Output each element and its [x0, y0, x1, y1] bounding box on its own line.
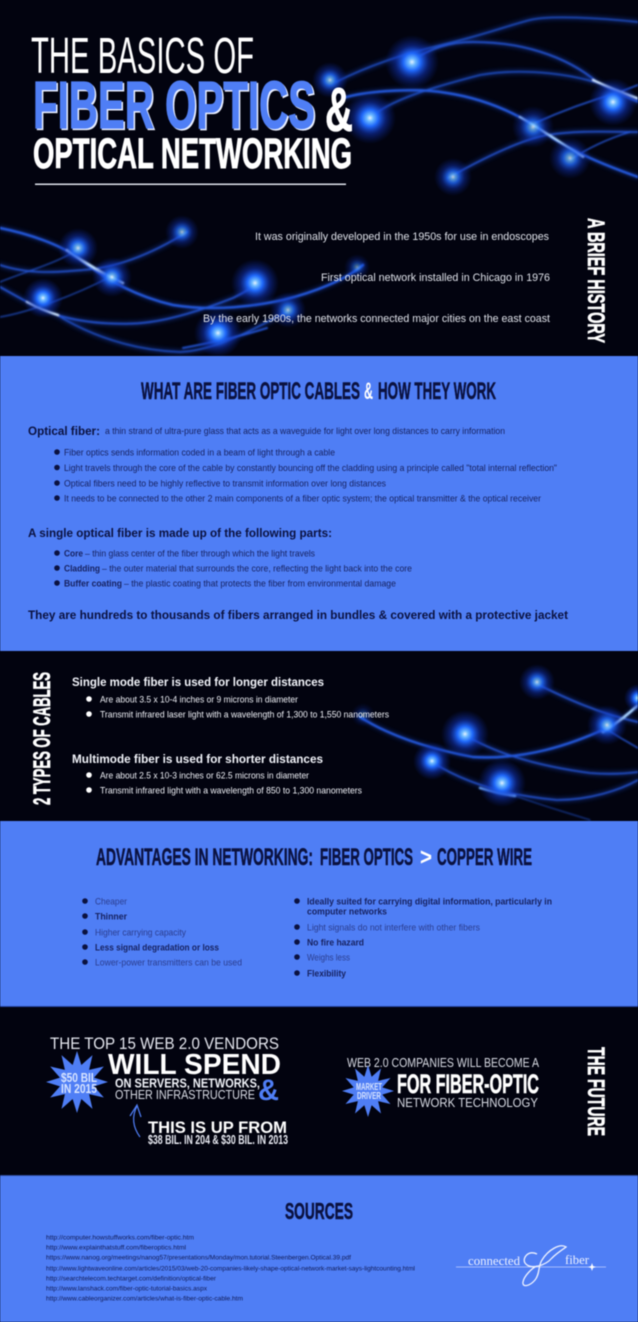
hero fiber strands	[336, 17, 638, 178]
logo: connected fiber: fiber	[565, 1252, 590, 1267]
parts bullets: Core	[64, 548, 83, 560]
optical fiber bullets	[54, 448, 557, 504]
cable types glow points	[351, 664, 638, 807]
optical fiber bullets: It needs to be connected to the other 2 main components of a fiber optic system; the optical transmitter & the optical receiver	[64, 494, 541, 504]
arrow	[130, 1105, 141, 1137]
up from figures: $38 BIL. IN 204 & $30 BIL. IN 2013	[148, 1132, 288, 1147]
servers line: ON SERVERS, NETWORKS,	[115, 1076, 260, 1090]
optical fiber bullets: Optical fibers need to be highly reflective to transmit information over long distances	[64, 478, 386, 490]
heading: ADVANTAGES IN NETWORKING:	[96, 844, 313, 871]
single mode block: Are about 3.5 x 10-4 inches or 9 microns in diameter	[100, 694, 298, 706]
panel: 2 types of cables	[29, 672, 389, 805]
parts subheading: A single optical fiber is made up of the following parts:	[28, 528, 332, 540]
history text: By the early 1980s, the networks connected major cities on the east coast	[203, 313, 550, 325]
title ampersand: &	[325, 76, 353, 145]
heading: COPPER WIRE	[437, 844, 532, 871]
left advantages list: Higher carrying capacity	[95, 928, 186, 938]
source links: http://www.lanshack.com/fiber-optic-tutorial-basics.aspx	[46, 1286, 208, 1292]
title line 2 highlight: FIBER OPTICS	[34, 70, 316, 144]
left advantages list: Lower-power transmitters can be used	[95, 958, 242, 968]
network technology: NETWORK TECHNOLOGY	[397, 1095, 538, 1110]
source links: http://searchtelecom.techtarget.com/definition/optical-fiber	[46, 1276, 217, 1282]
title rule	[35, 184, 346, 185]
heading: FIBER OPTICS	[320, 844, 413, 871]
parts bullets: – the plastic coating that protects the fiber from environmental damage	[124, 578, 396, 590]
optical fiber bullets: Fiber optics sends information coded in a beam of light through a cable	[64, 448, 335, 458]
heading: &	[364, 378, 373, 405]
right advantages list: Ideally suited for carrying digital information, particularly in	[307, 896, 552, 908]
parts bullets: – thin glass center of the fiber through which the light travels	[85, 548, 315, 560]
title line 2 highlight: FIBER OPTICS	[33, 68, 315, 143]
heading: SOURCES	[285, 1198, 353, 1224]
will spend: WILL SPEND	[108, 1049, 281, 1081]
hero glow points	[312, 35, 637, 196]
title line 2 highlight	[33, 68, 316, 144]
optical fiber bullets: Light travels through the core of the cable by constantly bouncing off the cladding using a principle called "total internal reflection"	[64, 463, 557, 474]
optical fiber definition: Optical fiber:	[28, 426, 100, 438]
parts bullets: – the outer material that surrounds the core, reflecting the light back into the core	[102, 564, 412, 574]
right advantages list: Flexibility	[307, 968, 347, 980]
infrastructure line: OTHER INFRASTRUCTURE	[115, 1087, 255, 1102]
history text	[203, 231, 550, 325]
source links: http://computer.howstuffworks.com/fiber-optic.htm	[46, 1234, 194, 1242]
multimode block: Multimode fiber is used for shorter distances	[72, 754, 323, 766]
right advantages list	[294, 896, 552, 980]
parts bullets: Cladding	[64, 564, 100, 574]
heading: >	[420, 844, 432, 871]
logo: connected fiber: connected	[468, 1253, 520, 1268]
parts bullets	[54, 548, 412, 590]
single mode block	[72, 677, 389, 720]
star: market driver: MARKET	[356, 1082, 382, 1093]
heading: 2 types of cables: 2 TYPES OF CABLES	[29, 672, 56, 805]
heading: HOW THEY WORK	[378, 378, 496, 405]
star: $50 bil in 2015: IN 2015	[61, 1081, 97, 1096]
up from headline: THIS IS UP FROM	[148, 1118, 287, 1137]
multimode block	[72, 754, 362, 796]
source links: http://www.lightwaveonline.com/articles/2015/03/web-20-companies-likely-shape-optical-network-market-says-lightcounting.html	[46, 1266, 416, 1272]
panel: what are fiber optic cables	[0, 356, 638, 651]
source links: http://www.explainthatstuff.com/fiberoptics.html	[46, 1244, 187, 1252]
history glow points	[23, 215, 370, 357]
history text: First optical network installed in Chicago in 1976	[321, 272, 550, 284]
title line 1: THE BASICS OF	[31, 27, 254, 84]
left advantages list: Thinner	[95, 912, 127, 922]
heading: a brief history: A BRIEF HISTORY	[582, 218, 609, 343]
blue ampersand: &	[258, 1074, 279, 1107]
heading: the future: THE FUTURE	[582, 1047, 609, 1136]
source links: http://www.cableorganizer.com/articles/what-is-fiber-optic-cable.htm	[46, 1296, 243, 1302]
bundles statement: They are hundreds to thousands of fibers arranged in bundles & covered with a protective jacket	[28, 610, 568, 622]
optical fiber definition: a thin strand of ultra-pure glass that acts as a waveguide for light over long distances to carry information	[105, 426, 505, 437]
history fiber strands	[0, 228, 363, 352]
star: market driver	[342, 1065, 394, 1117]
left advantages list: Less signal degradation or loss	[95, 942, 219, 954]
vendors headline: THE TOP 15 WEB 2.0 VENDORS	[50, 1034, 279, 1053]
left advantages list	[82, 896, 242, 968]
parts bullets: Buffer coating	[64, 578, 122, 590]
single mode block: Single mode fiber is used for longer distances	[72, 677, 324, 689]
title	[31, 27, 353, 178]
for fiber-optic: FOR FIBER-OPTIC	[397, 1069, 539, 1099]
logo: connected fiber	[456, 1246, 606, 1286]
source links	[46, 1234, 416, 1302]
panel: the future	[0, 1006, 638, 1147]
cable types fiber strands	[360, 683, 638, 820]
multimode block: Transmit infrared light with a wavelength of 850 to 1,300 nanometers	[100, 786, 362, 796]
multimode block: Are about 2.5 x 10-3 inches or 62.5 microns in diameter	[100, 770, 309, 782]
right advantages list: Weighs less	[307, 952, 350, 964]
right advantages list: No fire hazard	[307, 938, 364, 948]
star: $50 bil in 2015: $50 BIL	[61, 1070, 97, 1085]
title line 3: OPTICAL NETWORKING	[33, 130, 352, 178]
single mode block: Transmit infrared laser light with a wavelength of 1,300 to 1,550 nanometers	[100, 710, 389, 720]
right advantages list: computer networks	[307, 906, 387, 918]
left advantages list: Cheaper	[95, 896, 127, 908]
star: market driver: DRIVER	[357, 1091, 381, 1102]
web 2.0 line: WEB 2.0 COMPANIES WILL BECOME A	[347, 1055, 539, 1070]
right advantages list: Light signals do not interfere with other fibers	[307, 922, 480, 934]
panel: sources	[0, 1175, 638, 1322]
heading: WHAT ARE FIBER OPTIC CABLES	[141, 378, 360, 405]
panel: advantages in networking	[0, 821, 638, 1006]
source links: https://www.nanog.org/meetings/nanog57/presentations/Monday/mon.tutorial.Steenbergen.Optical.39.pdf	[46, 1254, 351, 1262]
history text: It was originally developed in the 1950s for use in endoscopes	[255, 231, 549, 243]
star: $50 bil in 2015	[46, 1051, 108, 1113]
